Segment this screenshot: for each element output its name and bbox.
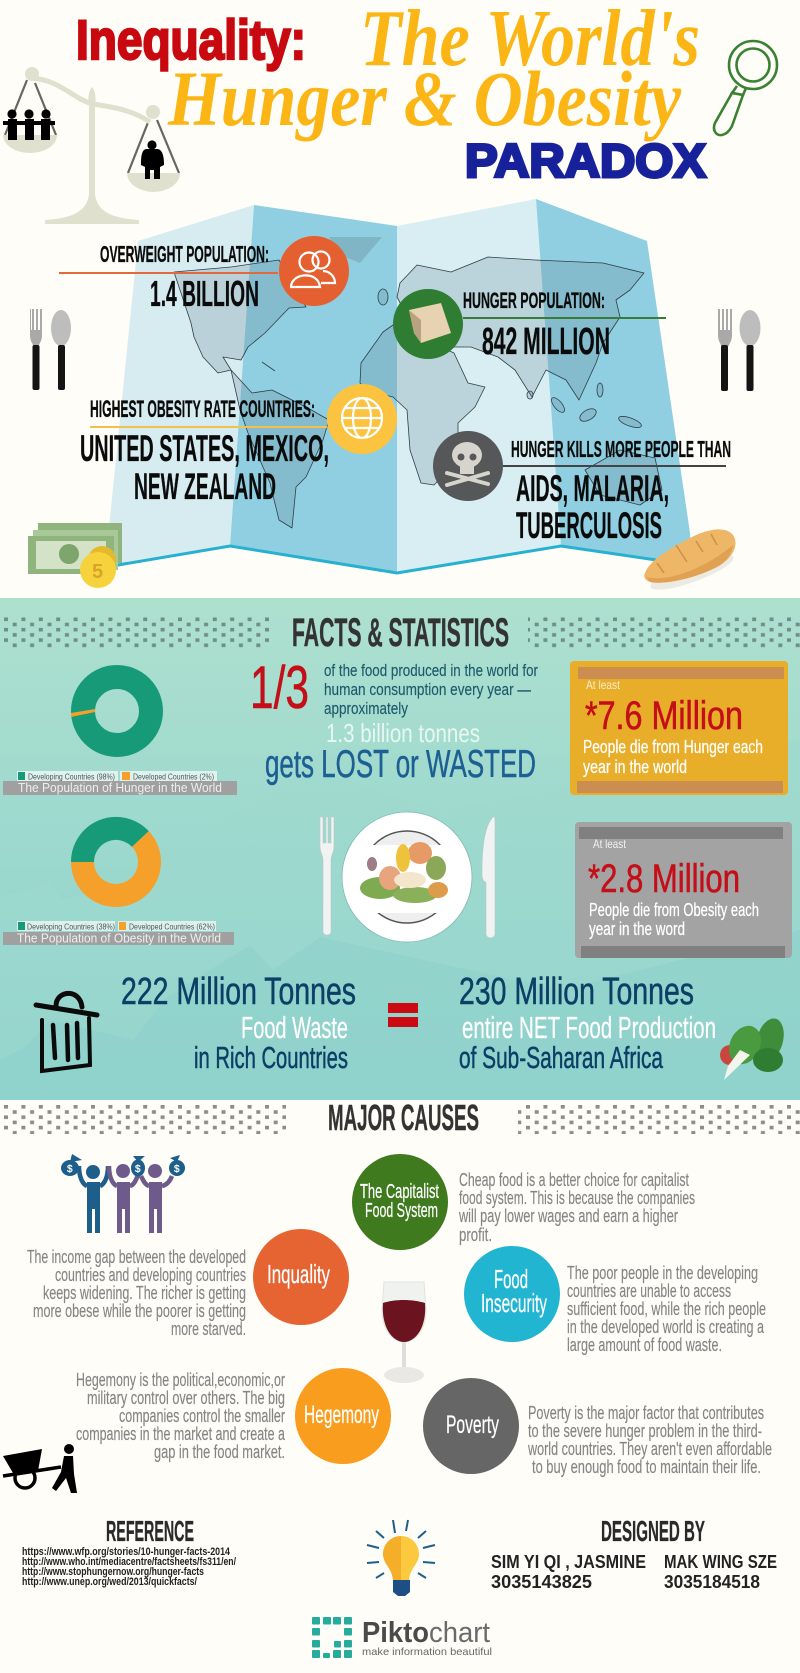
cause: food insecurity [464,1246,560,1342]
text block: highest obesity countries: UNITED STATES, MEXICO, [80,428,329,469]
text block: reference [22,1516,236,1588]
text block: designed by: MAK WING SZE [664,1552,777,1572]
title [76,0,706,187]
text block: food insecurity description [567,1263,766,1355]
title: Hunger & Obesity [167,55,681,142]
panel: folded world map [105,199,692,573]
icon: vegetables [720,1015,788,1080]
text block: designed by: SIM YI QI , JASMINE [491,1552,646,1572]
text block: overweight population [59,241,278,314]
text block: designed by [491,1516,777,1592]
text block: capitalist description [458,1170,695,1245]
text block: food insecurity description: large amount of food waste. [567,1335,722,1355]
text block: rich countries food waste: in Rich Countries [194,1040,348,1075]
icon: plate with fork and knife [320,812,495,942]
logo: piktochart: make information beautiful [362,1646,492,1658]
text block: reference: http://www.unep.org/wed/2013/quickfacts/ [22,1576,197,1588]
cause: poverty: Poverty [446,1411,499,1439]
icon: trash can [36,993,97,1071]
cause: hegemony: Hegemony [304,1401,379,1429]
heading: facts and statistics [3,611,800,655]
icon: people with money bags [61,1154,185,1233]
icon: overweight population circle [279,236,349,306]
panel: obesity deaths card: At least [593,837,627,851]
cause: the capitalist food system [352,1154,448,1250]
text block: rich countries food waste: Food Waste [241,1010,348,1045]
text block: sub-saharan africa production: of Sub-Saharan Africa [459,1040,664,1075]
cause: the capitalist food system: Food System [365,1200,438,1222]
icon: equals sign [388,1003,418,1027]
cause: food insecurity: Insecurity [481,1288,547,1318]
cause: poverty [423,1378,519,1474]
panel: obesity deaths card: year in the word [589,919,685,939]
panel: hunger deaths card: year in the world [583,757,687,777]
text block: hunger population [463,288,666,363]
logo: piktochart: Pikto [362,1617,429,1649]
text block: highest obesity countries [80,396,329,507]
text block: capitalist description: profit. [459,1225,492,1245]
icon: wine glass [382,1282,426,1383]
panel: hunger deaths card [570,661,788,795]
text block: rich countries food waste [121,971,356,1075]
cause: food insecurity: Food [494,1264,528,1294]
text block: one third of food wasted: 1.3 billion tonnes [326,718,480,748]
logo: piktochart [312,1617,492,1658]
text block: one third of food wasted: 1/3 [250,654,309,721]
chart caption: obesity: The Population of Obesity in the World [17,930,221,946]
icon: people with money bags: $ [67,1164,73,1175]
title: Inequality: [76,8,306,71]
text block: overweight population: 1.4 BILLION [150,273,259,314]
icon: magnifying glass [714,41,777,135]
text block: one third of food wasted: human consumption every year — [324,680,531,699]
panel: hunger deaths card: *7.6 Million [585,694,743,738]
panel: hunger deaths card: At least [586,678,621,692]
panel: facts and statistics background [0,598,800,1100]
text block: hunger population: 842 MILLION [482,321,610,363]
heading: major causes: MAJOR CAUSES [328,1097,479,1138]
legend: hunger donut [17,771,217,782]
text block: hunger kills: TUBERCULOSIS [516,505,662,546]
title: PARADOX [465,134,706,187]
text block: inquality description: countries and developing countries [55,1265,246,1285]
legend: obesity donut: Developed Countries (62%) [129,922,215,932]
icon: balance scale [3,67,180,224]
icon: people with money bags: $ [135,1164,141,1175]
icon: hunger population circle [393,289,463,359]
text block: inquality description [27,1247,246,1339]
text block: one third of food wasted: gets LOST or WASTED [265,743,536,786]
cause: the capitalist food system: The Capitalist [360,1181,439,1203]
text block: poverty description [527,1403,772,1477]
heading: facts and statistics: FACTS & STATISTICS [292,611,509,655]
legend: hunger donut: Developing Countries (98%) [28,772,115,782]
logo: piktochart: chart [429,1617,490,1649]
chart: hunger donut [71,677,151,745]
text block: sub-saharan africa production: 230 Million Tonnes [459,971,694,1013]
text block: hunger population: HUNGER POPULATION: [463,288,605,313]
text block: rich countries food waste: 222 Million Tonnes [121,971,356,1013]
text block: one third of food wasted: approximately [324,699,408,718]
text block: designed by: 3035143825 [491,1572,592,1592]
text block: highest obesity countries: HIGHEST OBESITY RATE COUNTRIES: [90,396,315,423]
text block: hegemony description: companies control the smaller [119,1406,285,1426]
panel: obesity deaths card [575,822,792,958]
text block: reference: https://www.wfp.org/stories/10-hunger-facts-2014 [22,1546,231,1558]
text block: inquality description: keeps widening. The richer is getting [43,1283,246,1303]
icon: bread [644,529,737,596]
text block: hegemony description: gap in the food market. [154,1442,285,1462]
text block: sub-saharan africa production [459,971,716,1075]
text block: highest obesity countries: NEW ZEALAND [134,466,276,507]
chart caption: hunger: The Population of Hunger in the World [18,780,222,795]
icon: left cutlery [30,309,71,390]
cause: inquality: Inquality [267,1259,330,1289]
legend: hunger donut: Developed Countries (2%) [133,772,214,782]
text block: designed by: 3035184518 [664,1572,760,1592]
icon: money and coins: 5 [92,561,103,583]
cause: hegemony [295,1368,391,1464]
icon: right cutlery [718,309,760,391]
text block: hegemony description: companies in the market and create a [76,1424,286,1444]
panel: obesity deaths card: *2.8 Million [588,857,740,901]
icon: skull circle [433,431,503,501]
text block: inquality description: more obese while the poorer is getting [33,1301,246,1321]
icon: globe circle [327,384,397,454]
text block: hegemony description: military control over others. The big [87,1388,285,1408]
heading: major causes [3,1097,800,1138]
text block: reference: http://www.who.int/mediacentre/factsheets/fs311/en/ [22,1556,236,1568]
text block: capitalist description: Cheap food is a better choice for capitalist [459,1170,689,1190]
text block: one third of food wasted: of the food produced in the world for [324,661,538,680]
text block: capitalist description: will pay lower wages and earn a higher [458,1206,678,1226]
text block: reference: REFERENCE [106,1516,194,1548]
text block: hegemony description [76,1370,286,1462]
text block: hunger kills [503,436,731,546]
text block: hegemony description: Hegemony is the political,economic,or [76,1370,285,1390]
icon: light bulb [367,1520,435,1596]
chart: obesity donut [82,828,149,895]
text block: hunger kills: AIDS, MALARIA, [516,468,669,509]
legend: obesity donut [17,921,216,932]
legend: obesity donut: Developing Countries (38%) [27,922,115,932]
text block: reference: http://www.stophungernow.org/hunger-facts [22,1566,204,1578]
text block: one third of food wasted [250,654,538,786]
text block: designed by: DESIGNED BY [601,1516,705,1548]
text block: overweight population: OVERWEIGHT POPULATION: [100,241,269,267]
icon: money and coins [28,523,122,588]
cause: inquality [253,1229,349,1325]
icon: person pulling cart [3,1444,77,1493]
text block: inquality description: more starved. [171,1319,246,1339]
text block: inquality description: The income gap between the developed [27,1247,246,1267]
icon: people with money bags: $ [174,1164,180,1175]
